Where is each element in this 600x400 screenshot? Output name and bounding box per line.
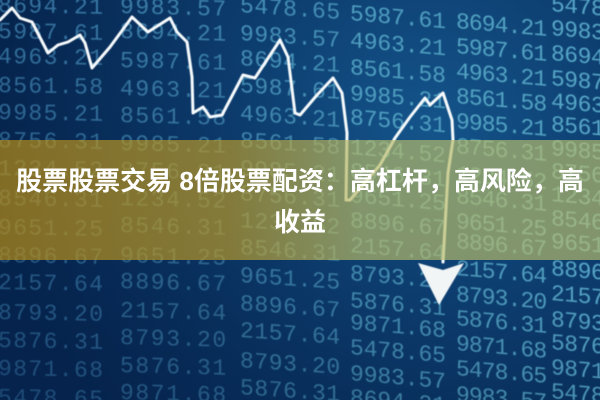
numbers column 5: 2157.64 <box>456 256 546 290</box>
numbers column 1: 9651.25 <box>0 215 104 243</box>
numbers column 2: 8793.20 <box>120 325 228 354</box>
numbers column 1: 5987.61 <box>0 19 104 47</box>
numbers column 4: 9983.57 <box>350 361 446 395</box>
numbers column 1: 1234.52 <box>0 156 104 184</box>
numbers column 4: 2157.64 <box>350 233 446 267</box>
numbers column 4: 4963.21 <box>350 28 446 62</box>
numbers column 4: 8756.31 <box>350 105 446 139</box>
numbers column 3: 8793.20 <box>240 348 341 381</box>
numbers column 4: 8546.31 <box>350 159 446 193</box>
numbers column 4: 8561.58 <box>350 55 446 89</box>
numbers column 5: 8896.67 <box>456 229 546 263</box>
numbers column 2: 5987.61 <box>120 48 228 77</box>
numbers column 4: 5478.65 <box>350 335 446 369</box>
numbers column 3: 8896.67 <box>240 291 341 324</box>
numbers column 2: 9985.21 <box>120 131 228 160</box>
numbers column 5: 5478.65 <box>456 356 546 390</box>
numbers column 4: 5987.61 <box>350 1 446 35</box>
numbers column 5: 8756.31 <box>456 134 546 168</box>
numbers column 3: 1234.52 <box>240 208 341 241</box>
numbers column 1: 8756.31 <box>0 128 104 156</box>
numbers column 3: 8546.31 <box>240 235 341 268</box>
numbers column 4: 5876.31 <box>350 288 446 322</box>
stock price line with arrow <box>0 8 464 305</box>
title: 收益 <box>274 207 326 237</box>
numbers column 3: 8756.31 <box>240 181 341 214</box>
numbers column 1: 8896.67 <box>0 243 104 271</box>
numbers column 5: 5876.31 <box>456 306 546 340</box>
numbers column 2: 8896.67 <box>120 269 228 298</box>
numbers column 5: 4963.21 <box>456 59 546 93</box>
numbers column 1: 2157.64 <box>0 270 104 298</box>
numbers column 1: 8561.58 <box>0 73 104 101</box>
numbers column 1: 8546.31 <box>0 186 104 214</box>
numbers column 3: 9651.25 <box>240 263 341 296</box>
numbers column 3: 4963.21 <box>240 101 341 134</box>
numbers column 2: 8694.21 <box>120 19 228 48</box>
numbers column 1: 5876.31 <box>0 328 104 356</box>
numbers column 1: 8793.20 <box>0 300 104 328</box>
numbers column 1: 9985.21 <box>0 100 104 128</box>
price line <box>0 8 453 262</box>
numbers column 2: 8546.31 <box>120 213 228 242</box>
numbers column 3: 9983.57 <box>240 21 341 54</box>
numbers column 5: 8694.21 <box>456 9 546 43</box>
arrow head <box>418 263 464 305</box>
numbers column 3: 8561.58 <box>240 128 341 161</box>
numbers column 4: 9985.21 <box>350 81 446 115</box>
numbers column 4: 8793.20 <box>350 261 446 295</box>
numbers column 2 <box>120 0 228 400</box>
title band <box>0 140 600 260</box>
numbers column 5: 5987.61 <box>456 34 546 68</box>
numbers column 3: 2157.64 <box>240 318 341 351</box>
numbers column 2: 2157.64 <box>120 298 228 327</box>
numbers column 5: 8546.31 <box>456 184 546 218</box>
numbers column 1: 9871.68 <box>0 356 104 384</box>
numbers column 3: 8694.21 <box>240 46 341 79</box>
title <box>16 166 584 237</box>
numbers column 4: 1234.52 <box>350 135 446 169</box>
numbers column 2: 1234.52 <box>120 186 228 215</box>
numbers column 2: 8756.31 <box>120 158 228 187</box>
numbers column 4: 8896.67 <box>350 208 446 242</box>
numbers column 4: 9871.68 <box>350 310 446 344</box>
numbers column 5: 9985.21 <box>456 109 546 143</box>
numbers column 4 <box>350 1 446 400</box>
numbers column 5: 9871.68 <box>456 331 546 365</box>
numbers column 4: 9651.25 <box>350 183 446 217</box>
numbers column 3: 5987.61 <box>240 73 341 106</box>
numbers column 2: 9651.25 <box>120 243 228 272</box>
numbers column 2: 8561.58 <box>120 103 228 132</box>
numbers column 6 <box>551 0 600 400</box>
numbers column 2: 5876.31 <box>120 353 228 382</box>
numbers column 1: 4963.21 <box>0 44 104 72</box>
numbers column 5: 8793.20 <box>456 282 546 316</box>
title: 股票股票交易 8倍股票配资：高杠杆，高风险，高 <box>16 166 584 196</box>
numbers column 1 <box>0 0 104 400</box>
numbers column 3: 9985.21 <box>240 156 341 189</box>
numbers column 5: 1234.52 <box>456 162 546 196</box>
numbers column 5 <box>456 9 546 400</box>
numbers column 3 <box>240 0 341 400</box>
numbers column 2: 4963.21 <box>120 76 228 105</box>
numbers column 5: 9651.25 <box>456 209 546 243</box>
numbers column 5: 8561.58 <box>456 84 546 118</box>
